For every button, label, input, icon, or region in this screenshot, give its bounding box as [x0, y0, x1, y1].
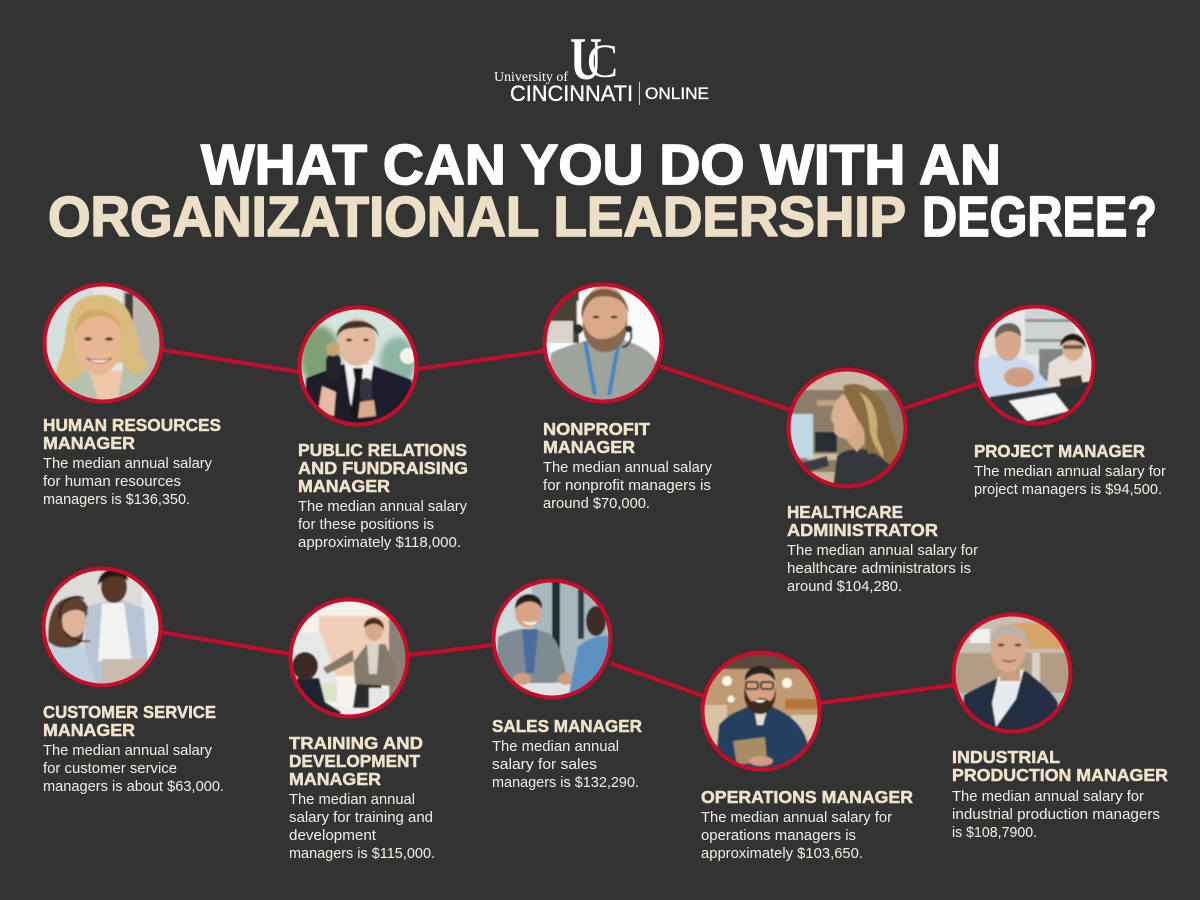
text: nonprofit manager: around $70,000.: [543, 496, 650, 512]
logo: University of Cincinnati Online: CINCINNATI: [510, 81, 633, 106]
text: operations manager: approximately $103,650.: [701, 846, 863, 862]
title: [48, 133, 1157, 248]
portrait: industrial production manager: [952, 613, 1072, 733]
text: operations manager: OPERATIONS MANAGER: [701, 787, 913, 807]
text: nonprofit manager: MANAGER: [543, 437, 635, 457]
text: healthcare administrator: The median annual salary for: [787, 543, 978, 559]
text: human resources manager: for human resources: [43, 474, 181, 490]
text: human resources manager: [43, 415, 221, 508]
text: training and development manager: [289, 733, 435, 862]
portrait: sales manager: [492, 579, 612, 699]
portrait: nonprofit manager: [543, 283, 663, 403]
text: project manager: PROJECT MANAGER: [974, 441, 1145, 461]
text: public relations and fundraising manager: for these positions is: [298, 517, 434, 533]
text: public relations and fundraising manager: [298, 440, 468, 551]
logo: University of Cincinnati Online: University of: [494, 70, 568, 85]
text: sales manager: The median annual: [492, 739, 619, 755]
text: training and development manager: salary for training and: [289, 810, 433, 826]
text: healthcare administrator: [787, 502, 978, 595]
portrait: training and development manager: [289, 598, 409, 718]
text: operations manager: The median annual salary for: [701, 810, 892, 826]
text: training and development manager: DEVELOPMENT: [289, 751, 420, 771]
title: DEGREE?: [922, 185, 1157, 248]
text: training and development manager: MANAGER: [289, 769, 381, 789]
text: customer service manager: MANAGER: [43, 720, 135, 740]
text: industrial production manager: is $108,7900.: [952, 825, 1037, 841]
text: project manager: The median annual salary for: [974, 464, 1166, 480]
text: industrial production manager: industrial production managers: [952, 807, 1160, 823]
connector path: bottom row: [160, 632, 954, 703]
portrait: project manager: [975, 305, 1095, 425]
text: industrial production manager: PRODUCTION MANAGER: [952, 765, 1168, 785]
text: human resources manager: MANAGER: [43, 433, 135, 453]
portrait: operations manager: [701, 651, 821, 771]
text: training and development manager: development: [289, 828, 376, 844]
portrait: customer service manager: [42, 567, 162, 687]
text: customer service manager: managers is about $63,000.: [43, 779, 224, 795]
text: sales manager: managers is $132,290.: [492, 775, 639, 791]
title: WHAT CAN YOU DO WITH AN: [201, 133, 1001, 196]
text: industrial production manager: [952, 747, 1168, 841]
text: healthcare administrator: HEALTHCARE: [787, 502, 903, 522]
logo: University of Cincinnati Online: U: [570, 26, 602, 92]
portrait: public relations and fundraising manager: [298, 306, 418, 426]
text: customer service manager: The median annual salary: [43, 743, 213, 759]
portrait: healthcare administrator: [787, 368, 907, 488]
text: public relations and fundraising manager: The median annual salary: [298, 499, 468, 515]
text: public relations and fundraising manager: PUBLIC RELATIONS: [298, 440, 467, 460]
text: industrial production manager: INDUSTRIAL: [952, 747, 1060, 767]
text: sales manager: SALES MANAGER: [492, 716, 642, 736]
text: public relations and fundraising manager: AND FUNDRAISING: [298, 458, 468, 478]
logo: University of Cincinnati Online: [494, 26, 709, 106]
logo: University of Cincinnati Online: ONLINE: [645, 85, 709, 103]
text: nonprofit manager: for nonprofit managers is: [543, 478, 711, 494]
text: project manager: project managers is $94,500.: [974, 482, 1162, 498]
text: customer service manager: [43, 702, 224, 795]
text: project manager: [974, 441, 1166, 498]
text: human resources manager: HUMAN RESOURCES: [43, 415, 221, 435]
text: operations manager: [701, 787, 913, 862]
logo: University of Cincinnati Online: C: [587, 35, 618, 88]
text: sales manager: salary for sales: [492, 757, 597, 773]
text: healthcare administrator: ADMINISTRATOR: [787, 520, 938, 540]
portrait: human resources manager: [43, 283, 163, 403]
text: public relations and fundraising manager: MANAGER: [298, 476, 390, 496]
connector path: top row: [163, 350, 977, 410]
text: customer service manager: for customer service: [43, 761, 177, 777]
text: human resources manager: managers is $136,350.: [43, 492, 190, 508]
text: customer service manager: CUSTOMER SERVICE: [43, 702, 216, 722]
text: healthcare administrator: healthcare administrators is: [787, 561, 971, 577]
text: operations manager: operations managers is: [701, 828, 856, 844]
text: training and development manager: The median annual: [289, 792, 415, 808]
text: industrial production manager: The median annual salary for: [952, 789, 1144, 805]
title: ORGANIZATIONAL LEADERSHIP: [48, 185, 906, 248]
text: public relations and fundraising manager: approximately $118,000.: [298, 535, 461, 551]
text: human resources manager: The median annual salary: [43, 456, 213, 472]
text: sales manager: [492, 716, 642, 791]
text: nonprofit manager: The median annual salary: [543, 460, 713, 476]
text: training and development manager: managers is $115,000.: [289, 846, 435, 862]
text: nonprofit manager: NONPROFIT: [543, 419, 650, 439]
text: training and development manager: TRAINING AND: [289, 733, 423, 753]
text: healthcare administrator: around $104,280.: [787, 579, 902, 595]
text: nonprofit manager: [543, 419, 713, 512]
